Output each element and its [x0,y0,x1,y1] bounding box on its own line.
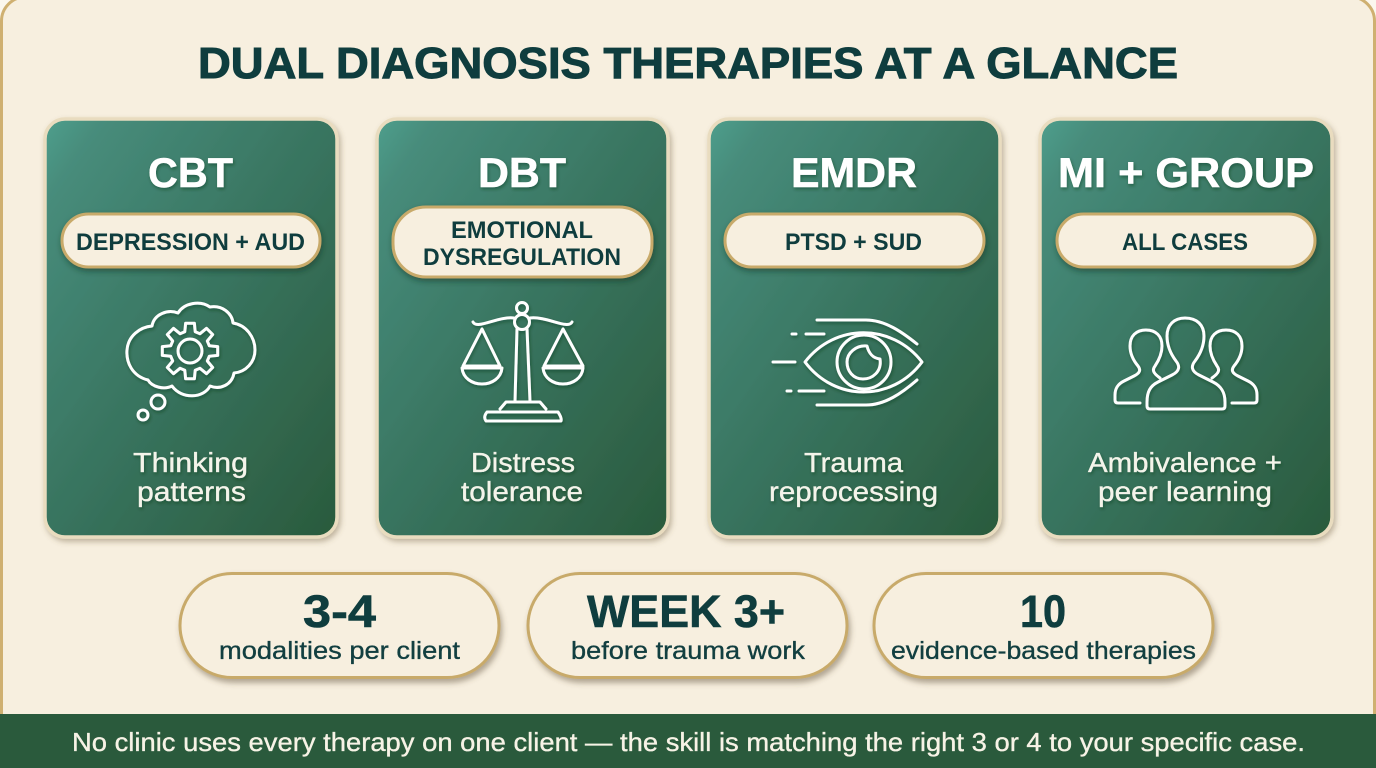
description: trauma reprocessing: Trauma [804,447,903,478]
panel: DBT [377,119,668,537]
icon: group of people [1115,318,1257,409]
description: distress tolerance: Distress [471,447,575,478]
panel: CBT [45,119,337,537]
description: ambivalence + peer learning [1088,447,1282,507]
description: distress tolerance [461,447,583,507]
stat: 3-4 modalities: modalities per client [219,637,460,665]
pill: All cases [1057,214,1315,267]
stat: week 3+: WEEK 3+ [587,586,785,637]
pill: PTSD + SUD [725,214,984,267]
stat: week 3+: before trauma work [571,637,806,665]
stat: 10 therapies: evidence-based therapies [891,637,1196,665]
stat: 10 therapies: 10 [1020,586,1066,637]
description: ambivalence + peer learning: peer learning [1098,476,1272,507]
stat: week 3+ [528,574,847,678]
panel: EMDR [709,119,1000,537]
heading: MI + GROUP: MI + GROUP [1058,149,1314,196]
card background [709,119,1000,537]
stat: 10 therapies [874,574,1213,678]
card background [45,119,337,537]
stat: 3-4 modalities: 3-4 [303,586,376,637]
panel: MI + Group [1040,119,1332,537]
description: ambivalence + peer learning: Ambivalence + [1088,447,1282,478]
description: trauma reprocessing: reprocessing [769,476,938,507]
heading: EMDR: EMDR [791,149,917,196]
title: DUAL DIAGNOSIS THERAPIES AT A GLANCE [198,39,1178,88]
footer banner: No clinic uses every therapy on one client — the skill is matching the right 3 or 4 to your specific case. [72,727,1305,757]
stat: 3-4 modalities [180,574,499,678]
description: thinking patterns: Thinking [133,447,248,478]
icon: thought cloud with gear [127,303,255,420]
icon: balance scales [462,302,583,421]
pill: All cases: ALL CASES [1122,229,1248,256]
description: distress tolerance: tolerance [461,476,583,507]
card background [377,119,668,537]
description: thinking patterns [133,447,248,507]
heading: DBT: DBT [478,149,566,196]
heading: CBT: CBT [148,149,233,196]
description: thinking patterns: patterns [137,476,246,507]
pill: PTSD + SUD: PTSD + SUD [785,229,922,256]
pill: Emotional dysregulation: DYSREGULATION [423,244,621,271]
pill: Emotional dysregulation [393,207,652,277]
pill: Depression + AUD: DEPRESSION + AUD [76,229,305,256]
description: trauma reprocessing [769,447,938,507]
icon: eye with motion lines [773,320,922,405]
pill: Emotional dysregulation: EMOTIONAL [451,217,593,244]
card background [1040,119,1332,537]
footer banner [0,714,1376,768]
pill: Depression + AUD [62,214,320,267]
